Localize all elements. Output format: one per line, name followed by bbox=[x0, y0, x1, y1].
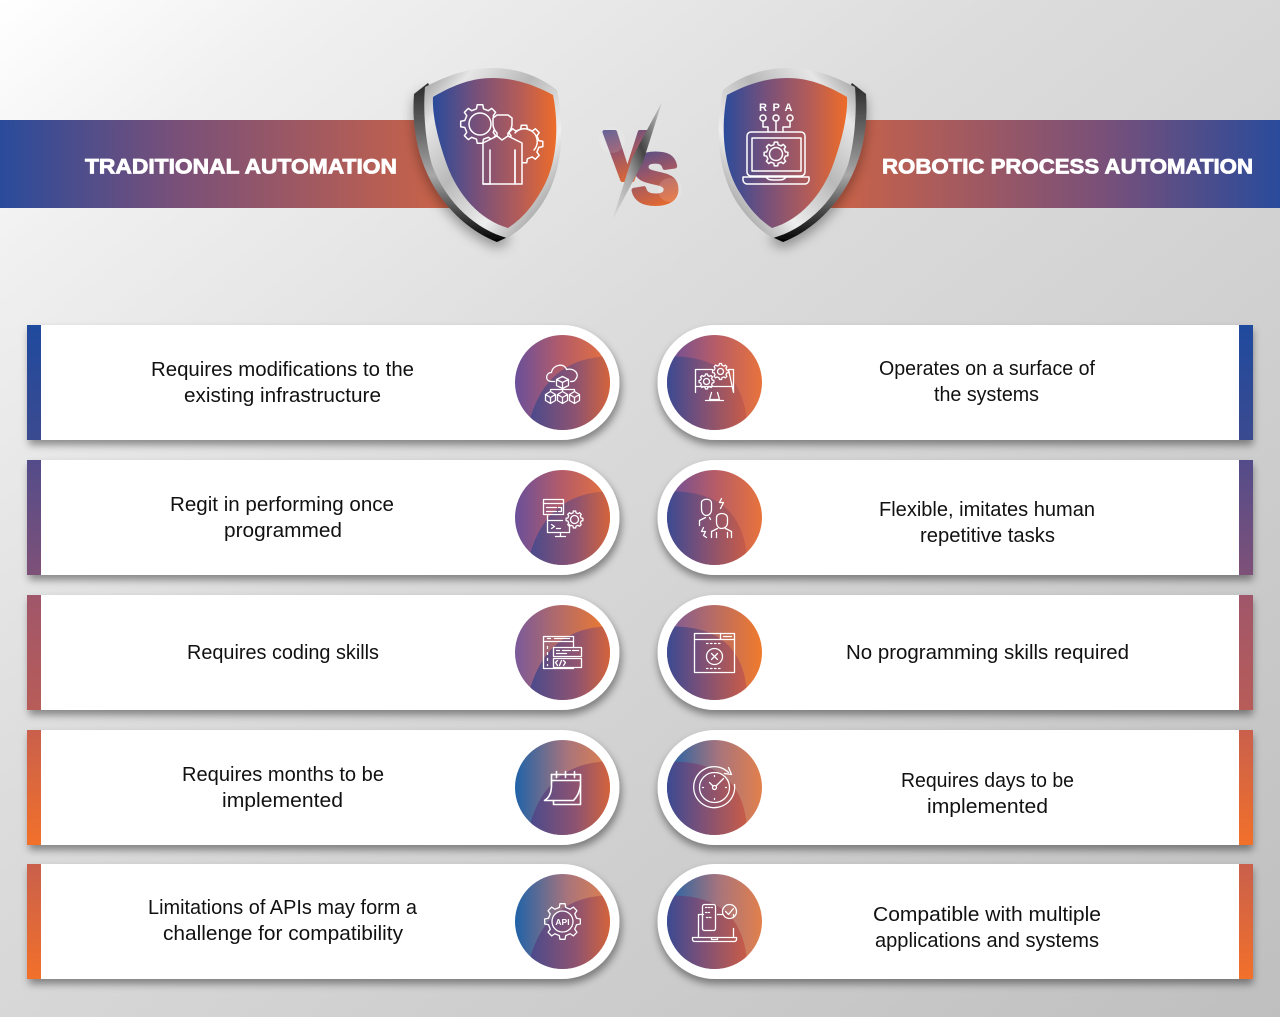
text: row 2 right bbox=[879, 498, 1095, 547]
icon: RPA laptop bbox=[743, 102, 809, 184]
text: row 1 right: Operates on a surface of bbox=[879, 357, 1095, 380]
row 4 right card bbox=[654, 730, 1253, 848]
icon: code panels bbox=[515, 605, 622, 712]
icon: two people exchanging bbox=[654, 470, 762, 578]
shield: robotic process automation bbox=[719, 68, 867, 242]
versus emblem bbox=[599, 102, 682, 221]
icon: monitor with gears bbox=[654, 335, 762, 442]
shield: traditional automation bbox=[413, 68, 561, 242]
icon: clock with arrow bbox=[654, 740, 762, 848]
text: row 1 left: Requires modifications to the bbox=[151, 358, 414, 381]
icon: devices with check bbox=[654, 874, 762, 982]
text: row 1 right bbox=[879, 357, 1095, 406]
text: row 3 left: Requires coding skills bbox=[187, 641, 379, 664]
icon: cloud hierarchy bbox=[515, 335, 622, 442]
icon: API gear: API bbox=[555, 917, 570, 927]
row 3 right card bbox=[654, 595, 1253, 712]
text: row 5 right bbox=[873, 903, 1101, 952]
text: row 4 left: Requires months to be bbox=[182, 763, 384, 786]
text: row 5 left bbox=[148, 896, 418, 945]
icon: person with gears bbox=[461, 105, 543, 184]
row 5 right card bbox=[654, 864, 1253, 982]
text: row 4 right: Requires days to be bbox=[901, 769, 1074, 792]
text: row 4 left bbox=[182, 763, 384, 812]
row 4 left card bbox=[27, 730, 622, 848]
text: row 4 left: implemented bbox=[222, 789, 343, 812]
text: row 5 left: challenge for compatibility bbox=[163, 922, 404, 945]
text: row 4 right: implemented bbox=[927, 795, 1048, 818]
row 1 right card bbox=[654, 325, 1253, 442]
slash bbox=[612, 102, 662, 221]
text: row 5 right: applications and systems bbox=[875, 929, 1099, 952]
heading: robotic process automation: ROBOTIC PROCESS AUTOMATION bbox=[882, 156, 1253, 178]
V letter: V bbox=[604, 117, 651, 195]
heading: traditional automation: TRADITIONAL AUTOMATION bbox=[85, 156, 397, 178]
text: row 2 left bbox=[170, 493, 394, 542]
text: row 2 left: Regit in performing once bbox=[170, 493, 394, 516]
S letter: S bbox=[632, 140, 679, 218]
text: row 2 right: Flexible, imitates human bbox=[879, 498, 1095, 521]
icon: RPA laptop: RPA bbox=[759, 102, 798, 114]
icon: code window and gear bbox=[515, 470, 622, 578]
row 2 right card bbox=[654, 460, 1253, 578]
icon: API gear bbox=[515, 874, 622, 982]
text: row 5 right: Compatible with multiple bbox=[873, 903, 1101, 926]
text: row 1 left bbox=[151, 358, 414, 407]
text: row 3 right: No programming skills required bbox=[846, 641, 1129, 664]
row 3 left card bbox=[27, 595, 622, 712]
banner: robotic process automation bbox=[830, 120, 1280, 208]
text: row 5 left: Limitations of APIs may form a bbox=[148, 896, 418, 919]
icon: window with cross bbox=[654, 605, 762, 712]
text: row 4 right bbox=[901, 769, 1074, 818]
text: row 2 right: repetitive tasks bbox=[920, 524, 1055, 547]
text: row 2 left: programmed bbox=[224, 519, 342, 542]
row 2 left card bbox=[27, 460, 622, 578]
icon: calendar bbox=[515, 740, 622, 848]
text: row 1 left: existing infrastructure bbox=[184, 384, 381, 407]
row 5 left card bbox=[27, 864, 622, 982]
banner: traditional automation bbox=[0, 120, 450, 208]
text: row 1 right: the systems bbox=[934, 383, 1039, 406]
row 1 left card bbox=[27, 325, 622, 442]
